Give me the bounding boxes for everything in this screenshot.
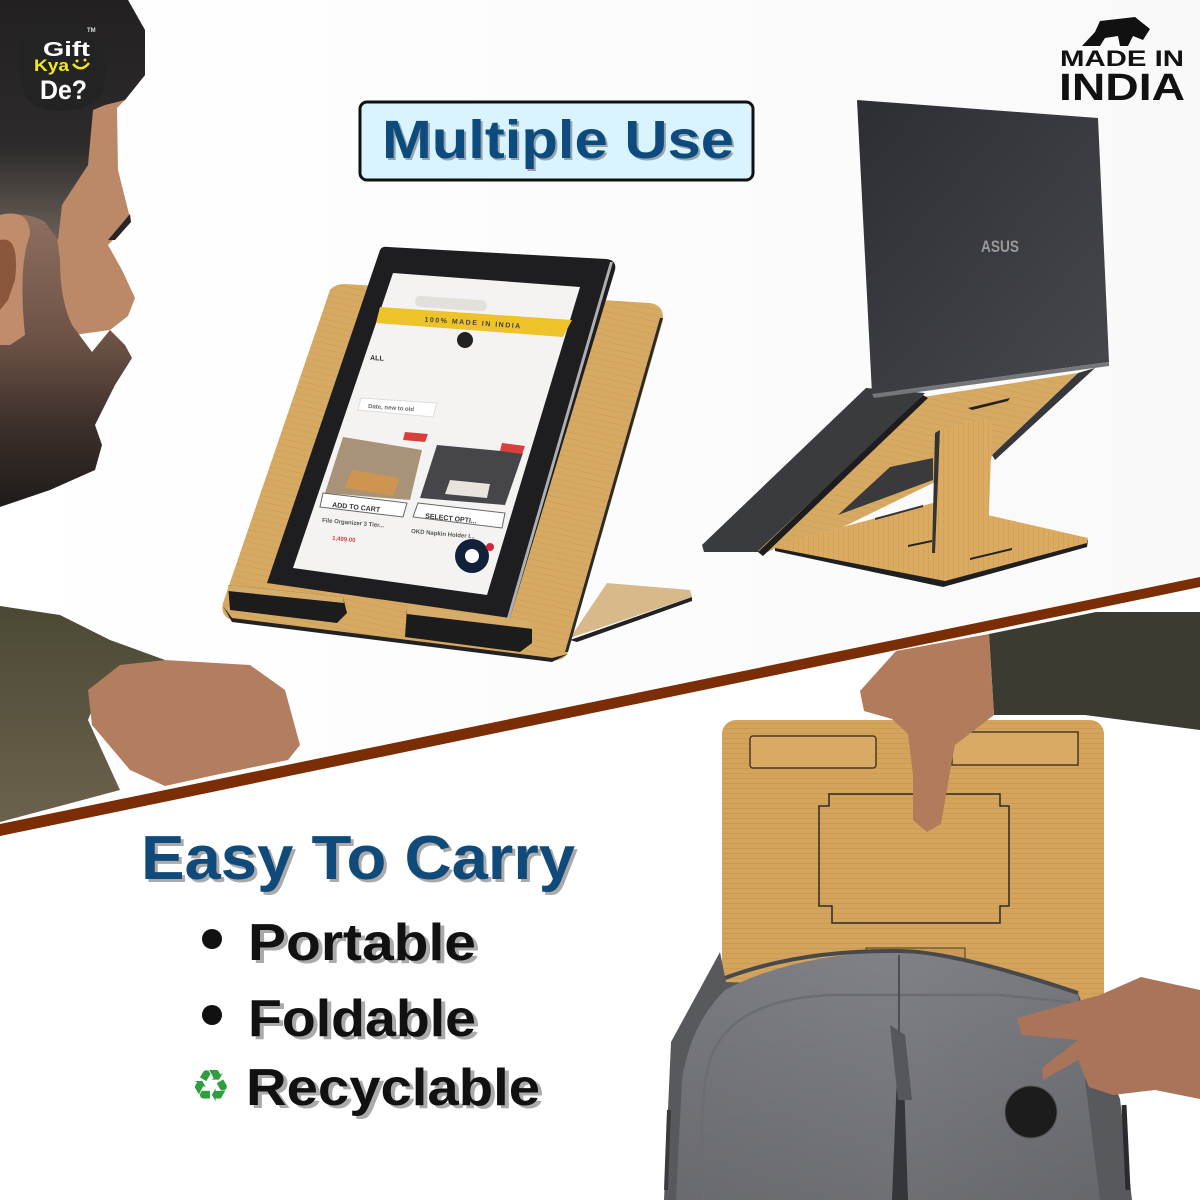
- laptop on stand: [702, 100, 1109, 587]
- bag front panel: [676, 951, 1100, 1200]
- made in india badge: MADE IN: [1060, 46, 1184, 71]
- logo: Gift Kya De: Gift: [43, 39, 90, 61]
- tablet screen: [293, 273, 580, 595]
- hand on backpack at right: [1017, 977, 1200, 1099]
- logo: Gift Kya De: TM: [87, 28, 96, 34]
- title box: Multiple Use: Multiple Use: [384, 112, 736, 172]
- title box: Multiple Use: [360, 102, 753, 180]
- tablet: File Organizer 3 Tier...: [322, 518, 385, 529]
- fold-out support: [932, 430, 940, 553]
- list item: Recyclable: Recyclable: [250, 1062, 544, 1120]
- made in india badge: [1059, 17, 1185, 109]
- tablet: Date, new to old: [368, 404, 415, 413]
- tablet: 1,499.00: [332, 536, 356, 544]
- list item: Recyclable: ♻: [191, 1061, 230, 1112]
- laptop base: [702, 388, 925, 552]
- bag side gusset: [664, 952, 1132, 1200]
- arm and hand at left: [0, 606, 300, 822]
- logo: Gift Kya De: Kya: [34, 56, 70, 75]
- stand back panel: [222, 284, 663, 660]
- tablet: 100% MADE IN INDIA: [424, 317, 522, 330]
- tablet holders: [228, 585, 533, 652]
- list item: Portable: Portable: [252, 917, 480, 975]
- made in india badge: INDIA: [1059, 67, 1185, 109]
- right sleeve: [989, 612, 1200, 730]
- stand plate: [758, 373, 1078, 555]
- wooden stand with tablet: [222, 247, 692, 662]
- feature list: [191, 914, 544, 1120]
- logo: Gift Kya De: [19, 17, 105, 111]
- wooden board in bag: [722, 720, 1104, 1010]
- tablet: OKD Napkin Holder I...: [411, 529, 475, 541]
- tablet: SELECT OPTI...: [425, 513, 477, 525]
- diagonal band divider: [0, 577, 1200, 836]
- list item: Foldable: Foldable: [252, 993, 480, 1051]
- tablet: ADD TO CART: [332, 502, 381, 514]
- heading: Easy To Carry: Easy To Carry: [141, 824, 576, 893]
- list item: Foldable: Foldable: [248, 990, 476, 1048]
- laptop on stand: ASUS: [981, 237, 1019, 256]
- hand holding board: [860, 634, 994, 832]
- stand foot: [570, 597, 692, 642]
- backpack: [664, 951, 1132, 1200]
- tablet: [267, 247, 615, 618]
- background: upper tone: [0, 0, 1200, 830]
- heading: Easy To Carry: Easy To Carry: [144, 827, 579, 896]
- man's head in profile: [0, 0, 145, 507]
- list item: Portable: Portable: [248, 914, 476, 972]
- stand base: [775, 507, 1088, 587]
- logo: Gift Kya De: De?: [40, 75, 87, 105]
- title box: Multiple Use: Multiple Use: [382, 110, 734, 170]
- tablet: ALL: [370, 355, 385, 363]
- list item: Recyclable: Recyclable: [246, 1059, 540, 1117]
- laptop lid: [857, 100, 1109, 394]
